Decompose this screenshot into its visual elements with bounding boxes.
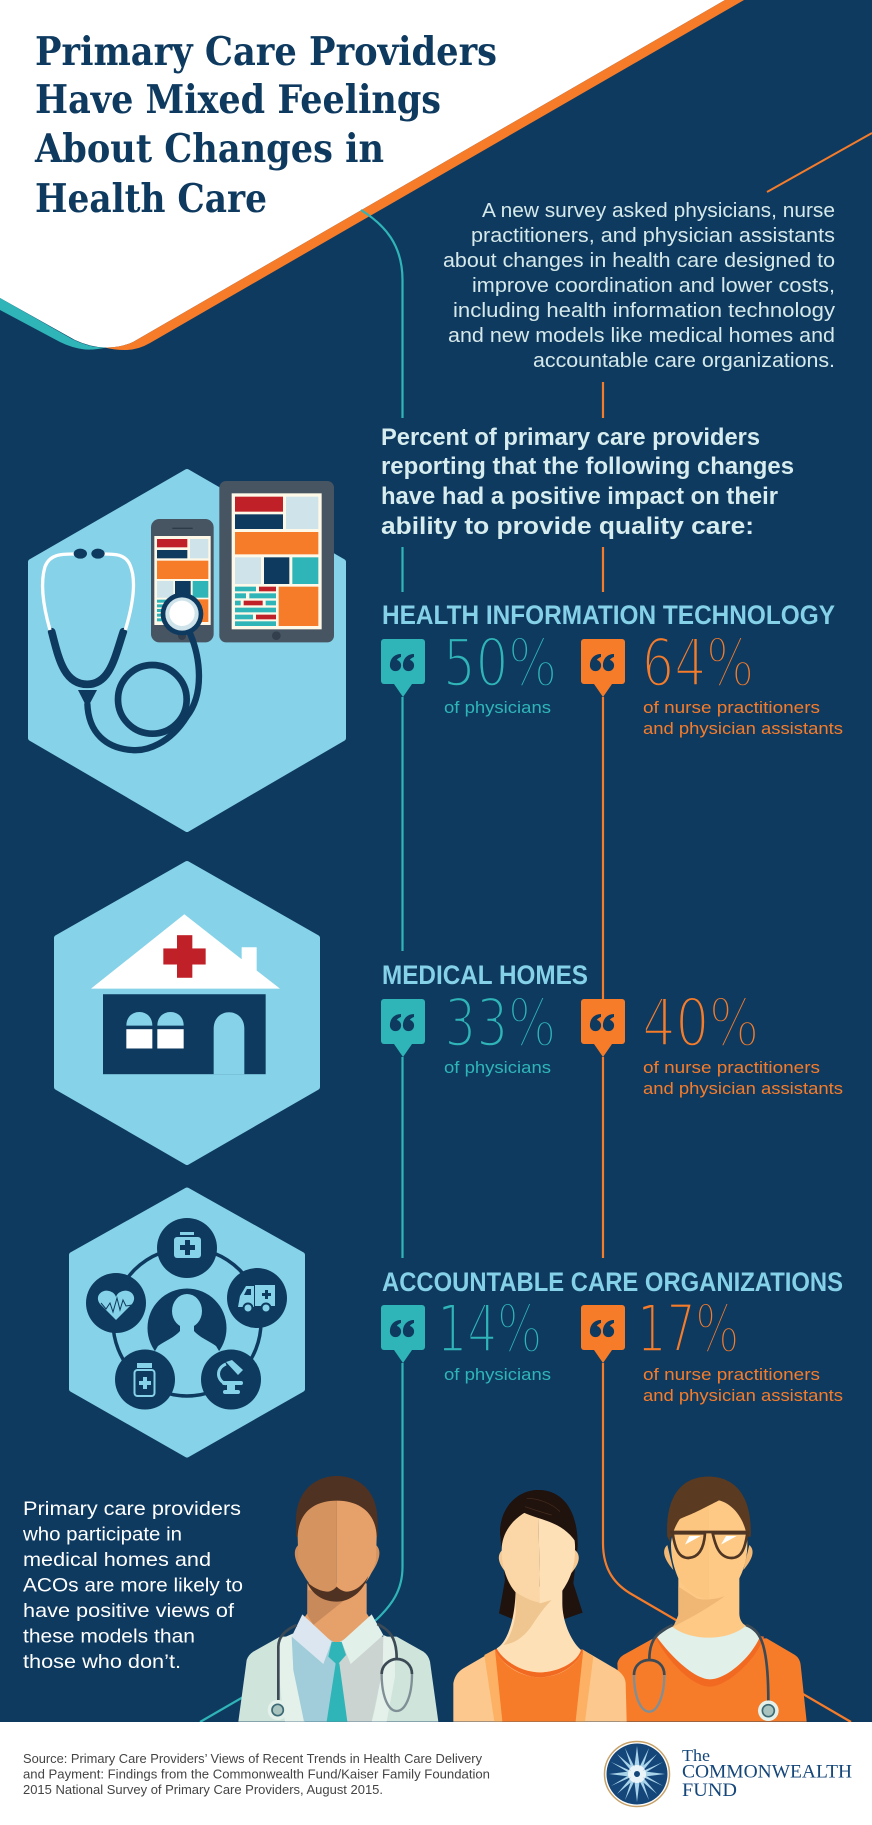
stat: 64% nurse practitioners and physician assistants: and physician assistants bbox=[643, 719, 843, 738]
icon: medical kit bbox=[174, 1232, 201, 1258]
intro text: accountable care organizations. bbox=[533, 350, 835, 372]
logo: The Commonwealth Fund bbox=[604, 1742, 852, 1806]
heading: HEALTH INFORMATION TECHNOLOGY bbox=[382, 600, 835, 630]
stat: 33% physicians: of physicians bbox=[444, 1058, 551, 1077]
hexagon: accountable care organizations bbox=[72, 1190, 302, 1454]
icon: teal quote bubble bbox=[381, 999, 425, 1057]
subheading: Percent of primary care providers bbox=[381, 424, 760, 451]
title: Have Mixed Feelings bbox=[35, 77, 441, 123]
stat: 40% nurse practitioners and physician assistants: of nurse practitioners bbox=[643, 1058, 820, 1077]
subheading: reporting that the following changes bbox=[381, 453, 794, 480]
stat: 33% physicians: 33% bbox=[444, 984, 556, 1062]
icon: microscope bbox=[218, 1360, 243, 1394]
bottom left text block: ACOs are more likely to bbox=[23, 1574, 243, 1596]
stat: 50% physicians: 50% bbox=[443, 624, 557, 702]
icon: medicine bottle bbox=[134, 1363, 154, 1396]
stat: 40% nurse practitioners and physician assistants: and physician assistants bbox=[643, 1079, 843, 1098]
title: Health Care bbox=[35, 176, 267, 222]
white title banner bbox=[0, 0, 744, 350]
bottom left text block: Primary care providers bbox=[23, 1498, 241, 1520]
stat: 50% physicians bbox=[443, 624, 557, 717]
stat: 64% nurse practitioners and physician assistants: of nurse practitioners bbox=[643, 698, 820, 717]
title: About Changes in bbox=[34, 126, 384, 172]
icon: orange quote bubble bbox=[581, 999, 625, 1057]
subheading: have had a positive impact on their bbox=[381, 483, 778, 510]
heading: MEDICAL HOMES bbox=[382, 960, 588, 990]
orange connector line bbox=[603, 382, 851, 1722]
stat: 64% nurse practitioners and physician assistants: 64% bbox=[642, 624, 754, 702]
icon: tablet and stethoscope bbox=[43, 481, 334, 750]
title: Primary Care Providers bbox=[35, 29, 497, 75]
section: health information technology bbox=[381, 600, 843, 738]
stat: 14% physicians: of physicians bbox=[444, 1365, 551, 1384]
icon: ambulance bbox=[238, 1285, 275, 1312]
section: medical homes bbox=[381, 960, 843, 1098]
stat: 17% nurse practitioners and physician assistants: of nurse practitioners bbox=[643, 1365, 820, 1384]
stat: 14% physicians: 14% bbox=[437, 1290, 542, 1368]
figure: woman in orange scrubs bbox=[453, 1490, 627, 1722]
stat: 14% physicians bbox=[437, 1290, 551, 1384]
hexagon: medical homes bbox=[57, 864, 317, 1162]
icon: teal quote bubble bbox=[381, 639, 425, 697]
intro text: practitioners, and physician assistants bbox=[471, 225, 835, 247]
teal connector line bbox=[200, 210, 402, 1722]
icon: network of care bbox=[86, 1218, 287, 1410]
stat: 50% physicians: of physicians bbox=[444, 698, 551, 717]
title bbox=[34, 29, 497, 222]
logo: The Commonwealth Fund: COMMONWEALTH bbox=[682, 1762, 852, 1782]
intro text: A new survey asked physicians, nurse bbox=[482, 200, 835, 222]
source text bbox=[23, 1751, 490, 1797]
logo: The Commonwealth Fund: The bbox=[682, 1746, 710, 1765]
subheading: ability to provide quality care: bbox=[381, 513, 754, 540]
intro text: including health information technology bbox=[453, 300, 835, 322]
bottom left text block: these models than bbox=[23, 1626, 195, 1648]
intro text: and new models like medical homes and bbox=[448, 325, 835, 347]
logo: The Commonwealth Fund: FUND bbox=[682, 1780, 737, 1801]
icon: teal quote bubble bbox=[381, 1305, 425, 1363]
stat: 40% nurse practitioners and physician assistants: 40% bbox=[642, 984, 759, 1062]
stat: 33% physicians bbox=[444, 984, 556, 1077]
subheading bbox=[381, 424, 794, 540]
icon: heart with pulse bbox=[98, 1291, 134, 1320]
bottom left text block: have positive views of bbox=[23, 1600, 235, 1622]
bottom left text block bbox=[22, 1498, 243, 1673]
bottom left text block: those who don’t. bbox=[23, 1651, 181, 1673]
stat: 17% nurse practitioners and physician assistants: and physician assistants bbox=[643, 1386, 843, 1405]
intro text: improve coordination and lower costs, bbox=[472, 275, 835, 297]
icon: orange quote bubble bbox=[581, 1305, 625, 1363]
stat: 40% nurse practitioners and physician assistants bbox=[642, 984, 843, 1098]
figure: male physician with beard bbox=[238, 1476, 438, 1722]
intro text: about changes in health care designed to bbox=[443, 250, 835, 272]
source text: and Payment: Findings from the Commonwealth Fund/Kaiser Family Foundation bbox=[23, 1766, 490, 1782]
bottom left text block: medical homes and bbox=[23, 1549, 211, 1571]
bottom left text block: who participate in bbox=[22, 1524, 182, 1546]
figure: man with glasses in orange scrubs bbox=[617, 1477, 807, 1722]
icon: orange quote bubble bbox=[581, 639, 625, 697]
orange accent line top right bbox=[767, 133, 872, 192]
source text: 2015 National Survey of Primary Care Providers, August 2015. bbox=[23, 1782, 383, 1797]
hexagon: health information technology bbox=[31, 472, 343, 829]
stat: 64% nurse practitioners and physician assistants bbox=[642, 624, 843, 738]
stat: 17% nurse practitioners and physician assistants: 17% bbox=[637, 1290, 739, 1368]
footer panel bbox=[0, 1722, 872, 1825]
icon: house with red cross bbox=[91, 914, 280, 1074]
section: accountable care organizations bbox=[381, 1267, 843, 1405]
stat: 17% nurse practitioners and physician assistants bbox=[637, 1290, 843, 1405]
intro text bbox=[443, 200, 835, 372]
source text: Source: Primary Care Providers’ Views of Recent Trends in Health Care Delivery bbox=[23, 1751, 482, 1766]
